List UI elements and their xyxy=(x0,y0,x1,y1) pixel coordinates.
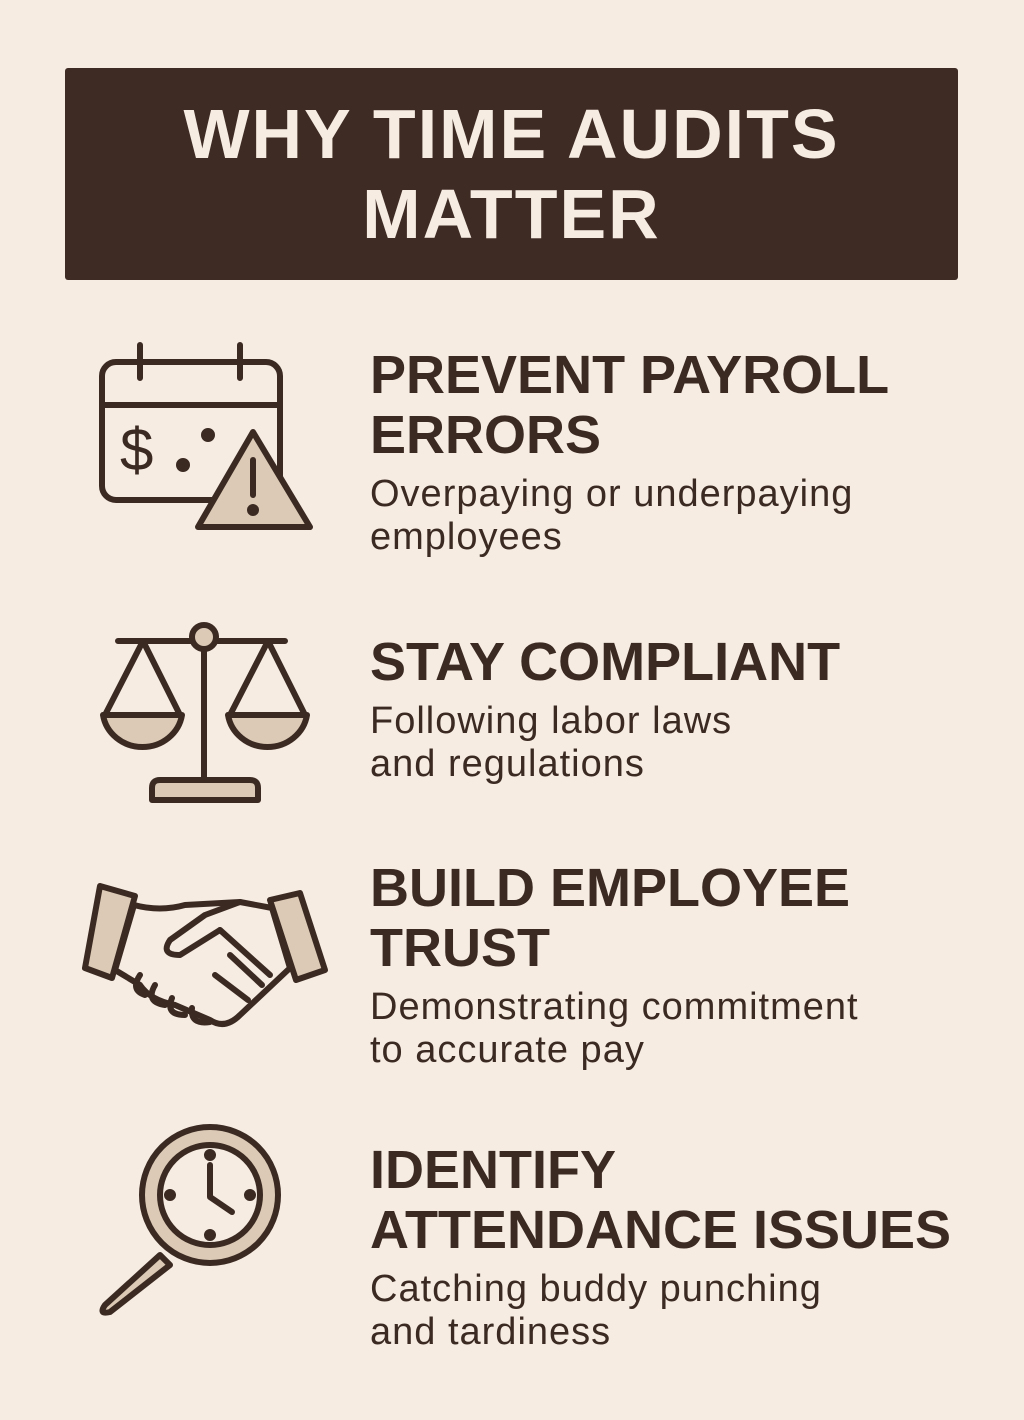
icon: handshake xyxy=(82,883,328,1028)
section 3: to accurate pay xyxy=(370,1029,645,1071)
section 2: Following labor laws xyxy=(370,700,732,742)
title: WHY TIME AUDITS xyxy=(183,95,840,173)
section 4 xyxy=(370,1140,951,1353)
section 3 xyxy=(370,858,859,1071)
section 2: STAY COMPLIANT xyxy=(370,632,840,692)
section 4: ATTENDANCE ISSUES xyxy=(370,1200,951,1260)
section 2: and regulations xyxy=(370,743,645,785)
section 4: Catching buddy punching xyxy=(370,1268,822,1310)
section 4: and tardiness xyxy=(370,1311,611,1353)
section 4: IDENTIFY xyxy=(370,1140,616,1200)
title xyxy=(65,68,958,280)
icon: magnifier clock xyxy=(99,1124,281,1316)
icon: scales xyxy=(100,622,310,803)
section 1: ERRORS xyxy=(370,405,601,465)
section 3: TRUST xyxy=(370,918,550,978)
icon: calendar with dollar and warning: $ xyxy=(120,416,153,483)
title: MATTER xyxy=(362,175,661,253)
section 1 xyxy=(370,345,889,558)
section 3: Demonstrating commitment xyxy=(370,986,859,1028)
section 1: PREVENT PAYROLL xyxy=(370,345,889,405)
section 3: BUILD EMPLOYEE xyxy=(370,858,850,918)
section 2 xyxy=(370,632,840,785)
section 1: Overpaying or underpaying xyxy=(370,473,853,515)
section 1: employees xyxy=(370,516,563,558)
icon: calendar with dollar and warning xyxy=(99,342,313,530)
